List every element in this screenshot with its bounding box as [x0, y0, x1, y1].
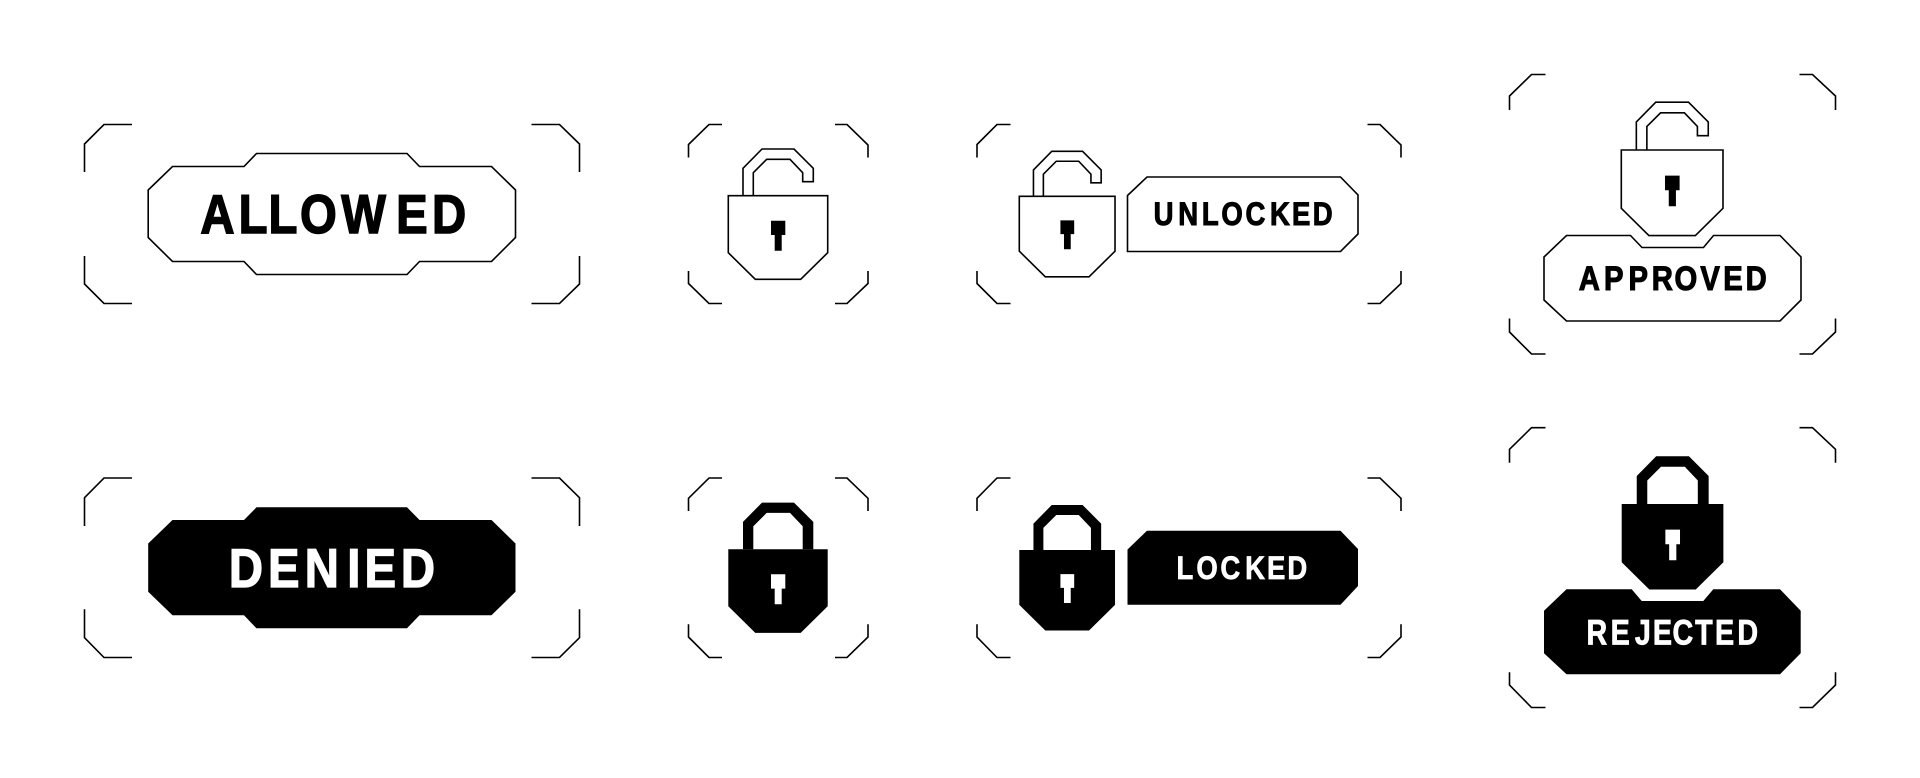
corner brackets — [977, 478, 1401, 658]
panel: closed padlock — [688, 478, 868, 658]
panel: unlocked — [977, 124, 1401, 304]
panel: locked — [977, 478, 1401, 658]
label: rejected: REJECTED — [1586, 613, 1758, 652]
badge outline — [1128, 177, 1358, 252]
corner brackets — [977, 124, 1401, 304]
icon: closed padlock — [1019, 505, 1115, 631]
icon: closed padlock — [1622, 456, 1723, 590]
icon: open padlock — [1019, 151, 1115, 277]
panel: open padlock — [688, 124, 868, 304]
badge filled — [148, 507, 515, 628]
corner brackets — [84, 478, 580, 658]
label: approved: APPROVED — [1579, 259, 1767, 298]
label: allowed: ALLOWED — [200, 184, 466, 245]
badge filled — [1544, 589, 1801, 674]
panel: allowed — [84, 124, 580, 304]
panel: denied — [84, 478, 580, 658]
icon: closed padlock — [728, 503, 828, 633]
badge outline — [1544, 236, 1801, 321]
label: unlocked: UNLOCKED — [1154, 197, 1333, 233]
label: denied: DENIED — [229, 537, 435, 599]
icon: open padlock — [728, 149, 828, 279]
badge outline — [148, 154, 515, 274]
corner brackets — [1510, 74, 1836, 354]
badge filled — [1128, 531, 1358, 605]
label: locked: LOCKED — [1176, 551, 1307, 586]
panel: rejected — [1510, 428, 1836, 708]
corner brackets — [688, 124, 868, 304]
icon: open padlock — [1621, 102, 1723, 236]
corner brackets — [688, 478, 868, 658]
corner brackets — [84, 124, 580, 304]
panel: approved — [1510, 74, 1836, 354]
corner brackets — [1510, 428, 1836, 708]
